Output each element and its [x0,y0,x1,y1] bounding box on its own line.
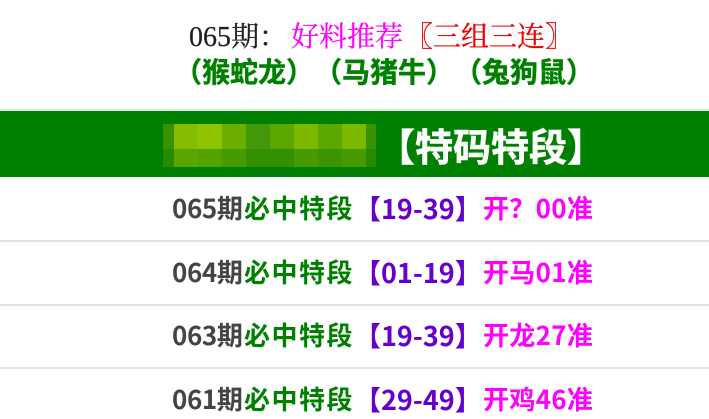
row: issue 061: 061期 [172,380,242,417]
row: issue 063: 开龙27准 [483,316,593,353]
row: issue 063 [172,315,593,354]
row: issue 063: 063期 [172,316,242,353]
divider [0,109,709,111]
row: issue 061: 开鸡46准 [483,380,593,417]
subtitle: zodiac groups [174,51,594,91]
row: issue 064: 【01-19】 [354,252,482,291]
row: issue 065: 开？00准 [483,189,593,226]
row: issue 061: 【29-49】 [354,379,482,418]
row: issue 063: 【19-39】 [354,315,482,354]
row: issue 065: 065期 [172,189,242,226]
title: issue recommendation: 好料推荐 [291,22,403,53]
title: issue recommendation: 065期： [189,22,287,53]
row: issue 061 [172,379,593,418]
subtitle: zodiac groups: （马猪牛） [314,51,454,91]
subtitle: zodiac groups: （兔狗鼠） [454,51,594,91]
row: issue 061: 必中特段 [244,380,354,417]
title: issue recommendation: 〖三组三连〗 [405,22,573,53]
divider [0,304,709,306]
divider [0,240,709,242]
row: issue 063: 必中特段 [244,316,354,353]
title: issue recommendation [189,22,573,53]
row: issue 064: 开马01准 [483,253,593,290]
row: issue 065: 【19-39】 [354,188,482,227]
row: issue 065 [172,188,593,227]
row: issue 064: 064期 [172,253,242,290]
panel: green banner [0,111,709,177]
subtitle: zodiac groups: （猴蛇龙） [174,51,314,91]
banner heading: 【特码特段】 [377,117,605,172]
row: issue 064: 必中特段 [244,253,354,290]
mosaic blurred name [163,124,376,167]
row: issue 064 [172,252,593,291]
divider [0,367,709,369]
row: issue 065: 必中特段 [244,189,354,226]
